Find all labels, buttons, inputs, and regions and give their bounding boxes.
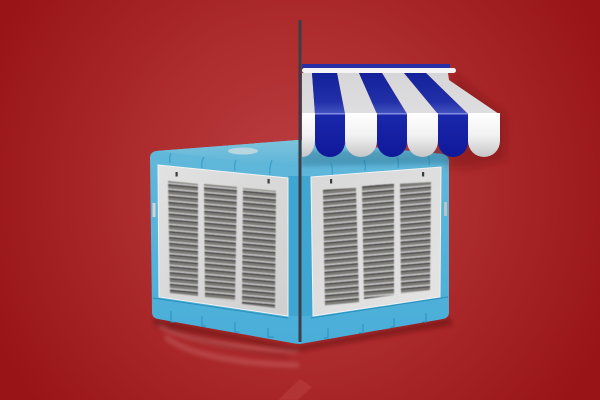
top ridges [170,153,429,175]
side clips [152,203,156,217]
canopy blue stripes [312,73,468,114]
awning top blue bar [302,64,450,68]
top cap [228,148,258,154]
canopy white stripes [302,73,499,114]
fold highlight [315,113,345,114]
floor mark below the divider [278,379,312,400]
right screws [330,172,424,184]
top face [156,140,442,168]
left panel [158,165,288,316]
motion arcs under the cooler [160,325,297,365]
awning shadow on cooler [301,150,449,166]
front corner column [288,176,313,316]
left louvers [168,181,276,308]
divider line [298,20,302,342]
awning white rail [302,68,456,73]
cooler body [150,140,449,344]
cooler shadow [154,318,452,352]
awning shadow on wall [449,74,505,168]
awning [302,64,500,157]
valance blue scallops [315,113,468,157]
right panel [311,167,441,316]
base seam and feet [153,297,448,338]
cooler [150,140,449,344]
right louvers [323,182,431,306]
left screws [176,172,270,184]
valance white scallops [302,113,500,157]
